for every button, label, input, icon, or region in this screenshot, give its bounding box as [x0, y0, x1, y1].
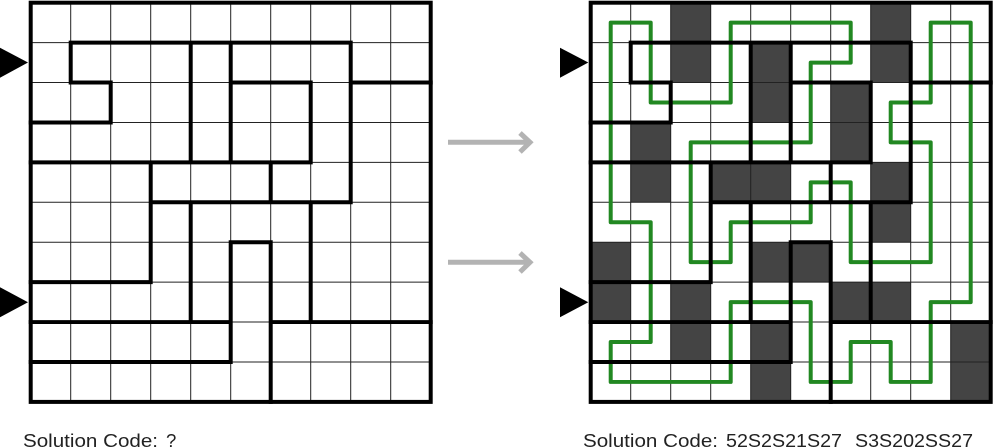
- outer border: [31, 3, 431, 402]
- green solution path: [611, 23, 971, 382]
- icon: left entry marker upper: [0, 48, 28, 78]
- shaded cells: [591, 3, 991, 402]
- thick region walls: [31, 43, 431, 402]
- outer border: [591, 3, 991, 402]
- thick region walls: [591, 43, 991, 402]
- panel: unsolved maze grid: [31, 3, 431, 402]
- thin grid lines: [591, 3, 991, 402]
- panel: solved maze grid: [591, 3, 991, 402]
- icon: left entry marker lower: [0, 287, 28, 317]
- arrow: lower: [448, 253, 530, 272]
- arrow: upper: [448, 133, 530, 152]
- caption: solved solution code: [583, 430, 973, 448]
- icon: right entry marker lower: [560, 287, 588, 317]
- thin grid lines: [31, 3, 431, 402]
- icon: right entry marker upper: [560, 48, 588, 78]
